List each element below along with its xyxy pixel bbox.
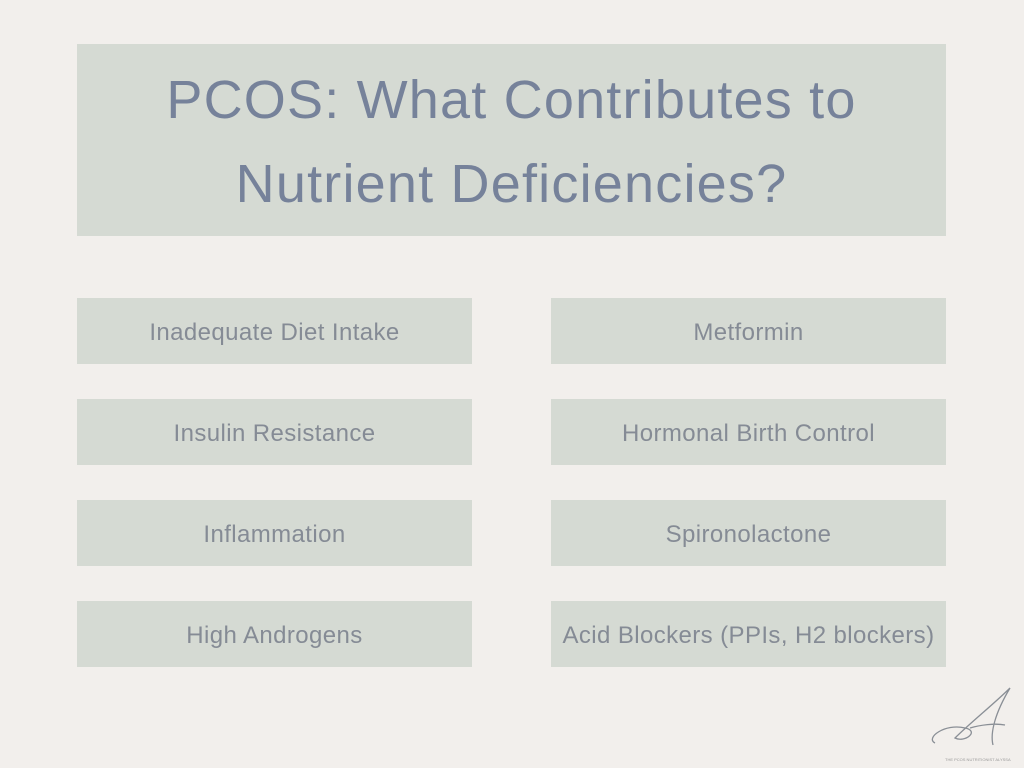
box: high androgens [77, 601, 472, 667]
box: high androgens: High Androgens [186, 622, 363, 649]
box: metformin: Metformin [693, 319, 804, 346]
title [77, 44, 946, 236]
box: spironolactone: Spironolactone [666, 521, 831, 548]
box: hormonal birth control: Hormonal Birth Control [622, 420, 875, 447]
box: inadequate diet intake: Inadequate Diet Intake [149, 319, 400, 346]
box: acid blockers [551, 601, 946, 667]
box: inflammation [77, 500, 472, 566]
box: inflammation: Inflammation [203, 521, 346, 548]
box: insulin resistance [77, 399, 472, 465]
title: Nutrient Deficiencies? [236, 154, 787, 214]
box: inadequate diet intake [77, 298, 472, 364]
box: insulin resistance: Insulin Resistance [174, 420, 375, 447]
logo [932, 688, 1011, 762]
box: spironolactone [551, 500, 946, 566]
box: acid blockers: Acid Blockers (PPIs, H2 blockers) [562, 622, 934, 649]
logo: THE PCOS NUTRITIONIST ALYSSA [945, 757, 1011, 762]
title: PCOS: What Contributes to [166, 70, 857, 130]
box: hormonal birth control [551, 399, 946, 465]
box: metformin [551, 298, 946, 364]
